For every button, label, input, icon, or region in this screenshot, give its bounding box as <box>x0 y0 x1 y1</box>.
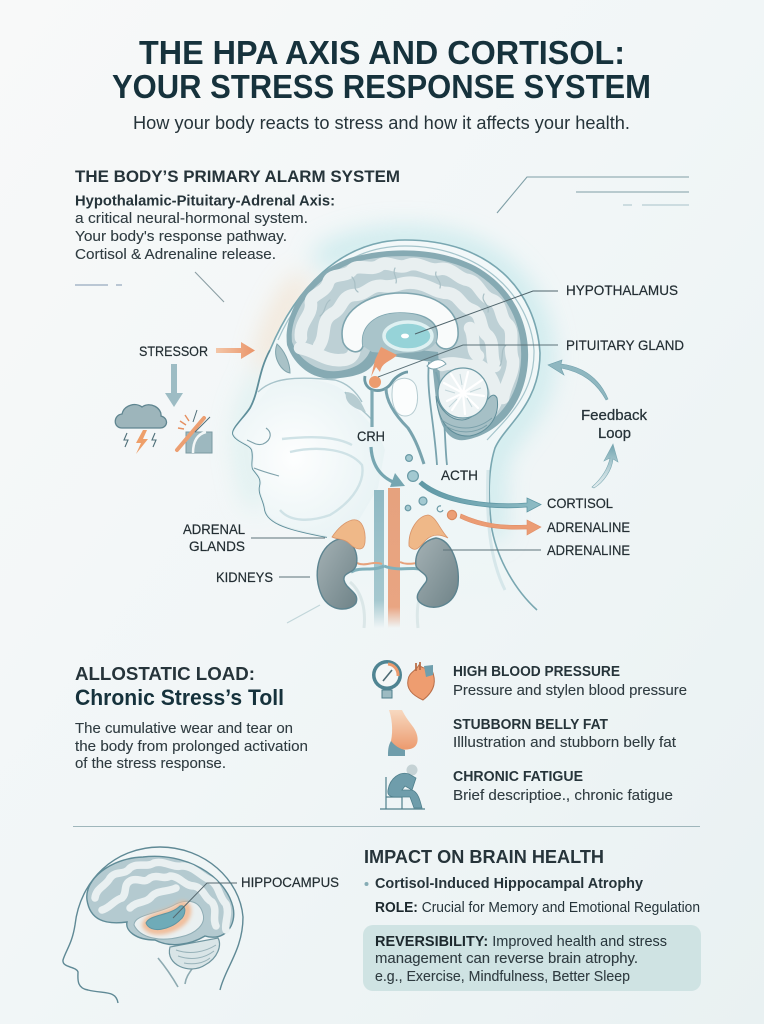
arrow: feedback upper <box>548 360 608 400</box>
spinal vessels <box>350 488 428 628</box>
panel: allostatic load <box>75 663 308 772</box>
label: hypothalamus: HYPOTHALAMUS <box>566 282 678 298</box>
allostatic heading: ALLOSTATIC LOAD: <box>75 663 255 684</box>
label: adrenal glands <box>183 521 325 554</box>
label: kidneys: KIDNEYS <box>216 569 273 585</box>
allostatic description: of the stress response. <box>75 755 226 772</box>
callout: reversibility <box>363 925 701 991</box>
item: high blood pressure: HIGH BLOOD PRESSURE <box>453 664 620 680</box>
intro text <box>75 192 335 263</box>
brain small <box>87 856 234 987</box>
intro text: Hypothalamic-Pituitary-Adrenal Axis: <box>75 192 335 210</box>
head outline small <box>63 847 243 1003</box>
title: YOUR STRESS RESPONSE SYSTEM <box>112 68 651 105</box>
allostatic description: The cumulative wear and tear on <box>75 720 293 737</box>
label: hippocampus <box>173 874 339 918</box>
allostatic heading: Chronic Stress’s Toll <box>75 685 284 710</box>
label: hippocampus: HIPPOCAMPUS <box>241 874 339 890</box>
icon: broken stick <box>177 410 212 453</box>
item: chronic fatigue <box>380 764 673 809</box>
pituitary gland <box>369 376 381 388</box>
label: adrenal glands: GLANDS <box>189 538 245 554</box>
label: pituitary gland: PITUITARY GLAND <box>566 337 684 353</box>
icon: storm cloud <box>115 405 167 454</box>
face interior <box>233 379 385 537</box>
allostatic description <box>75 720 308 772</box>
section heading: THE BODY’S PRIMARY ALARM SYSTEM <box>75 168 400 186</box>
allostatic description: the body from prolonged activation <box>75 738 308 755</box>
cerebellum <box>436 368 498 436</box>
role text: ROLE: Crucial for Memory and Emotional Regulation <box>375 900 700 916</box>
icon: heart <box>408 662 434 700</box>
label: hypothalamus <box>415 282 678 334</box>
glow around head <box>245 240 541 530</box>
label: CRH: CRH <box>357 428 385 444</box>
icon: pressure gauge <box>372 660 402 698</box>
arrow: stressor to head <box>216 342 255 359</box>
corpus callosum crescent <box>342 293 458 352</box>
brain with hippocampus illustration <box>63 847 339 1003</box>
item: stubborn belly fat <box>388 710 677 756</box>
icon: belly figure <box>388 710 418 756</box>
item: stubborn belly fat: Illlustration and stubborn belly fat <box>453 734 677 751</box>
hypothalamus orange region <box>371 347 397 377</box>
callout: reversibility: REVERSIBILITY: Improved health and stress <box>375 933 667 950</box>
allostatic heading <box>75 663 284 710</box>
title <box>112 34 651 105</box>
arrow: to adrenaline <box>460 514 541 535</box>
label: pituitary gland <box>378 337 684 377</box>
bullet: hippocampal atrophy: Cortisol-Induced Hippocampal Atrophy <box>375 876 643 892</box>
hypothalamus <box>384 322 432 350</box>
panel: impact on brain health <box>363 847 701 991</box>
arrow: stressor down <box>165 364 183 407</box>
item: chronic fatigue: Brief descriptioe., chronic fatigue <box>453 787 673 804</box>
item: high blood pressure <box>372 660 687 700</box>
hippocampus <box>144 903 189 932</box>
label: adrenaline second: ADRENALINE <box>547 542 630 558</box>
panel: primary alarm system intro <box>75 168 400 263</box>
item: high blood pressure: Pressure and stylen blood pressure <box>453 682 687 699</box>
kidneys <box>317 538 458 609</box>
hormone bubbles <box>405 455 457 520</box>
item: stubborn belly fat: STUBBORN BELLY FAT <box>453 717 608 733</box>
impact heading: IMPACT ON BRAIN HEALTH <box>364 847 604 867</box>
arrow: to cortisol <box>419 481 541 512</box>
subtitle: How your body reacts to stress and how it affects your health. <box>133 112 630 133</box>
label: cortisol: CORTISOL <box>547 495 613 511</box>
arrow: feedback lower <box>592 444 618 488</box>
label: kidneys <box>216 569 310 585</box>
label: ACTH: ACTH <box>441 467 478 483</box>
label: adrenaline: ADRENALINE <box>547 519 630 535</box>
head and anatomy illustration <box>233 240 541 640</box>
intro text: Cortisol & Adrenaline release. <box>75 246 276 263</box>
intro text: Your body's response pathway. <box>75 228 287 245</box>
brainstem <box>386 360 447 465</box>
callout: reversibility: management can reverse brain atrophy. <box>375 950 638 967</box>
label: stressor: STRESSOR <box>139 343 208 359</box>
head outline <box>233 240 540 640</box>
arrow: CRH <box>371 447 405 487</box>
intro text: a critical neural-hormonal system. <box>75 210 308 227</box>
label: adrenal glands: ADRENAL <box>183 521 245 537</box>
sinus shape <box>276 344 290 373</box>
label: feedback loop: Loop <box>598 425 631 442</box>
adrenal glands <box>332 515 448 549</box>
icon: seated figure <box>380 764 425 809</box>
title: THE HPA AXIS AND CORTISOL: <box>139 34 625 71</box>
callout: reversibility: e.g., Exercise, Mindfulness, Better Sleep <box>375 968 630 985</box>
cerebrum <box>287 250 528 440</box>
label: feedback loop: Feedback <box>581 407 648 424</box>
item: chronic fatigue: CHRONIC FATIGUE <box>453 769 583 785</box>
